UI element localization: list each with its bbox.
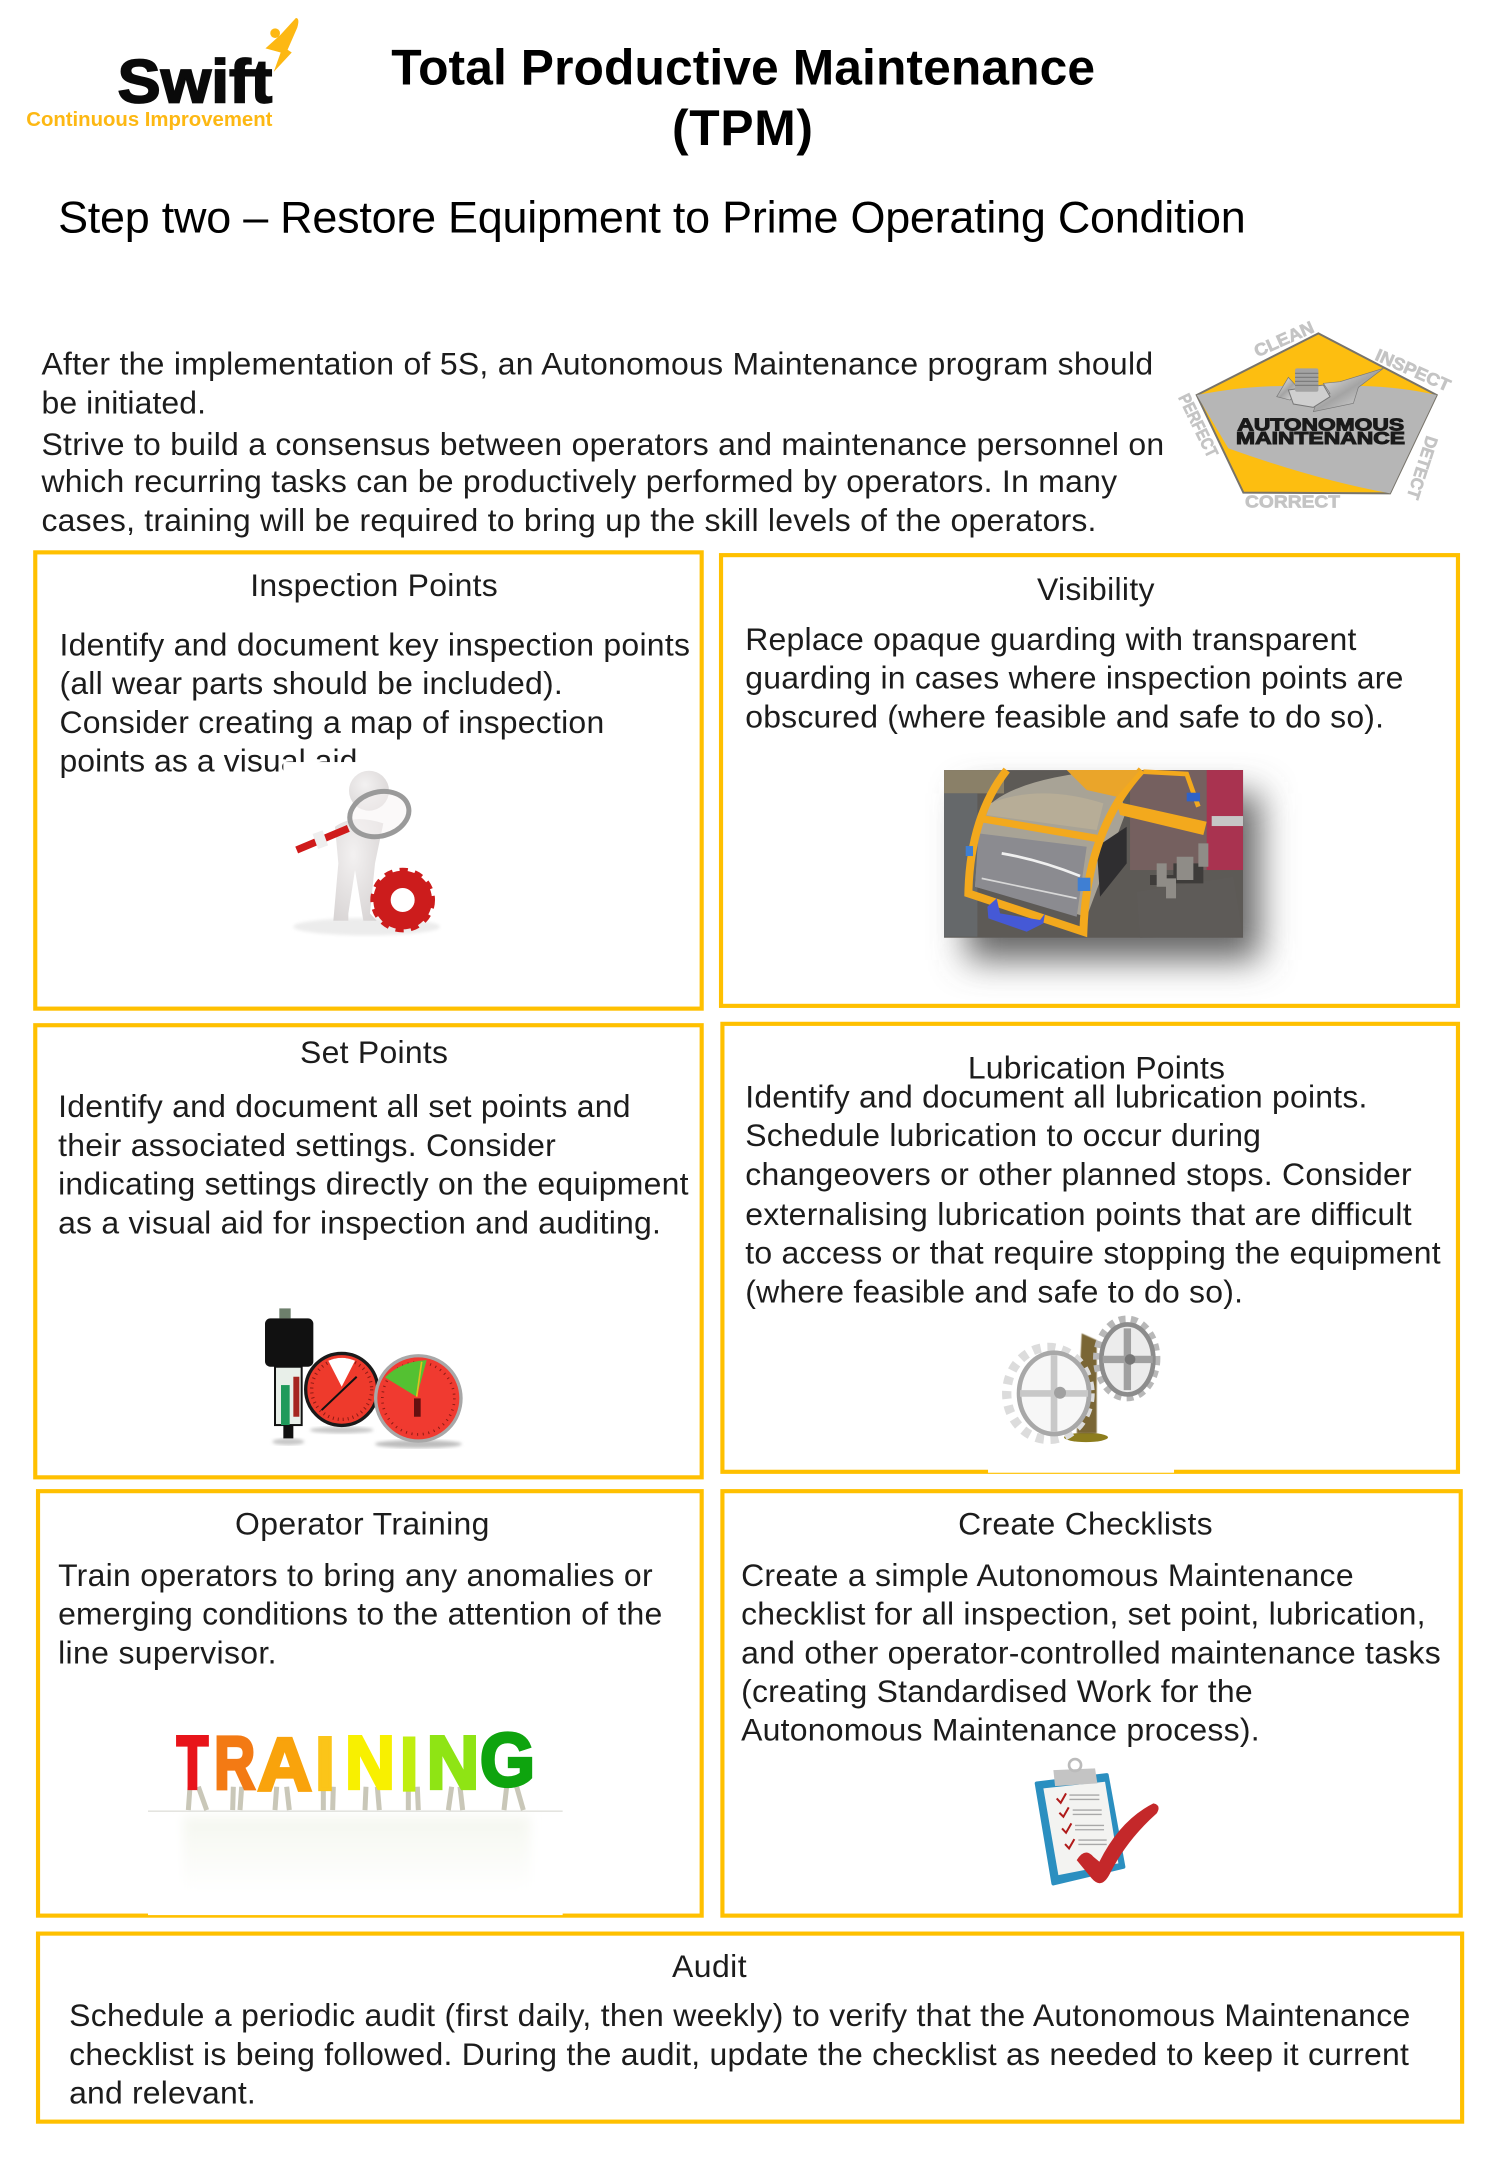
text: visibility: Replace opaque guarding with transparent	[745, 621, 1356, 657]
text: visibility: guarding in cases where inspection points are	[745, 660, 1403, 696]
icon: training letters carried by figures: A	[257, 1722, 312, 1806]
text: set points: Identify and document all set points and	[58, 1088, 630, 1124]
heading: lubrication points: Lubrication Points	[968, 1049, 1225, 1085]
text: inspection points: Consider creating a map of inspection	[59, 704, 604, 740]
text: set points: their associated settings. Consider	[58, 1127, 556, 1163]
text: operator training: Train operators to bring any anomalies or	[58, 1557, 653, 1593]
heading: operator training: Operator Training	[235, 1506, 489, 1542]
text: create checklists	[741, 1557, 1441, 1748]
logo: Swift Continuous Improvement: Swift	[118, 47, 272, 115]
panel: audit	[38, 1934, 1462, 2122]
text: lubrication points: Schedule lubrication to occur during	[745, 1117, 1261, 1153]
icon: training letters carried by figures: I	[315, 1721, 335, 1805]
text: operator training	[58, 1557, 662, 1670]
text: create checklists: and other operator-controlled maintenance tasks	[741, 1634, 1441, 1670]
text: operator training: line supervisor.	[58, 1634, 277, 1670]
icon: clipboard with red check mark	[1037, 1759, 1159, 1883]
title	[391, 39, 1095, 156]
panel: set points	[35, 1025, 702, 1477]
icon: autonomous maintenance pentagon: CLEAN	[1251, 317, 1317, 361]
icon: training letters carried by figures: T	[177, 1720, 208, 1804]
text: audit: and relevant.	[69, 2075, 256, 2111]
icon: training letters carried by figures: I	[400, 1722, 418, 1806]
text: visibility	[745, 621, 1403, 734]
icon: training letters carried by figures: N	[345, 1720, 395, 1804]
text: create checklists: Create a simple Autonomous Maintenance	[741, 1557, 1354, 1593]
icon: autonomous maintenance pentagon: DETECT	[1403, 434, 1442, 502]
text: operator training: emerging conditions to the attention of the	[58, 1596, 662, 1632]
text: set points	[58, 1088, 689, 1240]
text: create checklists: (creating Standardised Work for the	[741, 1673, 1253, 1709]
heading: visibility: Visibility	[1037, 571, 1155, 607]
icon: filter and pressure gauges	[265, 1308, 462, 1448]
text: inspection points: points as a visual aid.	[59, 743, 366, 779]
panel: operator training	[38, 1491, 702, 1916]
text: visibility: obscured (where feasible and safe to do so).	[745, 698, 1384, 734]
title: Total Productive Maintenance	[391, 39, 1095, 95]
intro text: which recurring tasks can be productively performed by operators. In many	[40, 463, 1117, 499]
text: set points: as a visual aid for inspection and auditing.	[58, 1204, 661, 1240]
text: lubrication points: to access or that require stopping the equipment	[745, 1235, 1441, 1271]
heading: create checklists: Create Checklists	[958, 1506, 1213, 1542]
intro text: After the implementation of 5S, an Autonomous Maintenance program should	[41, 346, 1153, 382]
icon: training letters carried by figures: N	[427, 1720, 479, 1804]
text: lubrication points: changeovers or other planned stops. Consider	[745, 1156, 1412, 1192]
text: inspection points: (all wear parts should be included).	[59, 665, 563, 701]
icon: lubricated gears	[988, 1310, 1174, 1473]
text: inspection points	[59, 626, 690, 779]
intro text	[40, 346, 1164, 538]
panel: inspection points	[35, 552, 702, 1009]
photo: transparent machine guard on lathe	[944, 770, 1260, 960]
panel: visibility	[721, 555, 1458, 1006]
logo: Swift Continuous Improvement: Continuous Improvement	[26, 109, 273, 131]
icon: autonomous maintenance pentagon: CORRECT	[1245, 491, 1340, 511]
text: create checklists: Autonomous Maintenance process).	[741, 1712, 1260, 1748]
icon: autonomous maintenance pentagon: MAINTENANCE	[1236, 428, 1405, 448]
text: lubrication points: Identify and document all lubrication points.	[745, 1078, 1367, 1114]
text: lubrication points: externalising lubrication points that are difficult	[745, 1196, 1412, 1232]
text: create checklists: checklist for all inspection, set point, lubrication,	[741, 1596, 1425, 1632]
text: audit: checklist is being followed. During the audit, update the checklist as needed to keep it current	[69, 2036, 1409, 2072]
logo: Swift Continuous Improvement	[26, 18, 298, 131]
text: inspection points: Identify and document key inspection points	[59, 626, 690, 662]
icon: autonomous maintenance pentagon: INSPECT	[1372, 345, 1454, 396]
title: (TPM)	[672, 100, 813, 156]
subtitle: Step two – Restore Equipment to Prime Operating Condition	[58, 191, 1246, 242]
heading: inspection points: Inspection Points	[250, 567, 498, 603]
panel: lubrication points	[722, 1024, 1458, 1473]
text: set points: indicating settings directly on the equipment	[58, 1166, 689, 1202]
icon: training letters carried by figures: G	[480, 1718, 535, 1802]
text: audit: Schedule a periodic audit (first daily, then weekly) to verify that the Autonomous Maintenance	[69, 1997, 1410, 2033]
intro text: cases, training will be required to bring up the skill levels of the operators.	[41, 502, 1096, 538]
heading: set points: Set Points	[300, 1034, 448, 1070]
icon: autonomous maintenance pentagon: PERFECT	[1174, 390, 1223, 461]
icon: autonomous maintenance pentagon	[1174, 317, 1454, 511]
text: lubrication points: (where feasible and safe to do so).	[745, 1273, 1243, 1309]
icon: training letters carried by figures: R	[214, 1720, 255, 1804]
text: audit	[69, 1997, 1410, 2111]
text: lubrication points	[745, 1078, 1441, 1309]
heading: audit: Audit	[672, 1948, 747, 1984]
icon: autonomous maintenance pentagon: AUTONOMOUS	[1237, 415, 1404, 435]
icon: figure with magnifier and gear	[283, 762, 470, 949]
icon: training letters carried by figures	[148, 1718, 563, 1915]
intro text: Strive to build a consensus between operators and maintenance personnel on	[41, 426, 1164, 462]
panel: create checklists	[722, 1491, 1461, 1916]
intro text: be initiated.	[41, 384, 206, 420]
